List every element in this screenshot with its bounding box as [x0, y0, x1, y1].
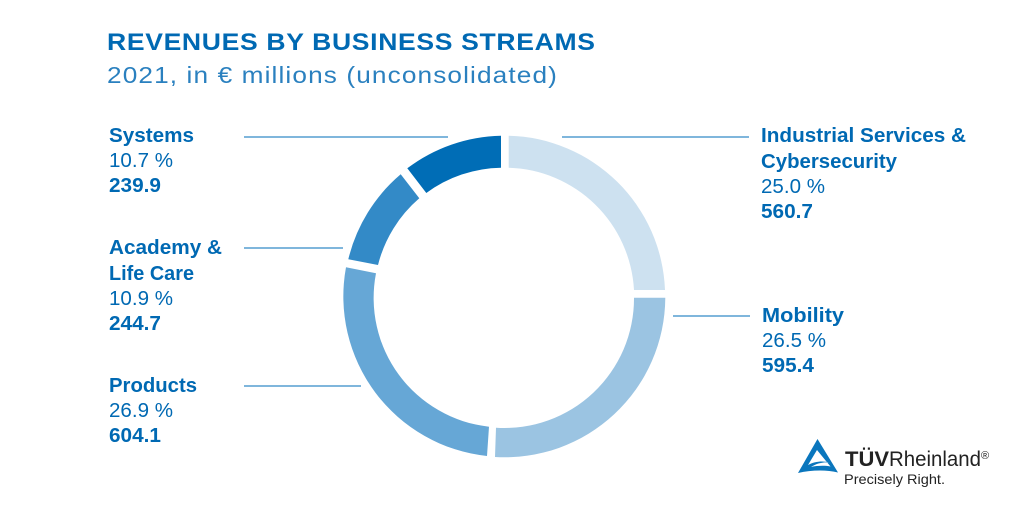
logo tagline: Precisely Right. — [844, 471, 945, 487]
logo: TÜV Rheinland — [798, 439, 989, 487]
segment: Products — [343, 267, 489, 456]
label: Academy & Life Care: Academy & — [109, 237, 222, 259]
leader line: Systems — [244, 136, 448, 138]
label: Products: Products — [109, 375, 197, 397]
icon: triangle — [798, 439, 838, 473]
segment: Systems — [407, 136, 501, 193]
label: Industrial Services & Cybersecurity — [761, 125, 966, 223]
label: Mobility — [762, 305, 845, 377]
label: Industrial Services & Cybersecurity: 560.7 — [761, 201, 813, 223]
title: REVENUES BY BUSINESS STREAMS — [107, 29, 596, 56]
label: Mobility: Mobility — [762, 305, 845, 327]
logo wordmark: Rheinland: Rheinland — [889, 448, 981, 471]
leader line: Products — [244, 385, 361, 387]
segment: Industrial Services & Cybersecurity — [509, 136, 665, 290]
leader line: Mobility — [673, 315, 750, 317]
registered mark: ® — [981, 450, 989, 462]
label: Mobility: 595.4 — [762, 355, 815, 377]
label: Academy & Life Care: 10.9 % — [109, 288, 173, 310]
segment: Mobility — [495, 298, 665, 457]
donut chart — [343, 136, 665, 457]
leader line: Industrial Services & Cybersecurity — [562, 136, 749, 138]
label: Industrial Services & Cybersecurity: Industrial Services & — [761, 125, 966, 147]
segment: Academy & Life Care — [348, 174, 419, 265]
label: Academy & Life Care — [109, 237, 222, 335]
label: Systems: 239.9 — [109, 175, 161, 197]
leader line: Academy & Life Care — [244, 247, 343, 249]
label: Products: 26.9 % — [109, 400, 173, 422]
label: Systems: 10.7 % — [109, 150, 173, 172]
label: Systems — [109, 125, 194, 197]
label: Mobility: 26.5 % — [762, 330, 826, 352]
subtitle: 2021, in € millions (unconsolidated) — [107, 62, 558, 88]
label: Products — [109, 375, 197, 447]
label: Academy & Life Care: 244.7 — [109, 313, 161, 335]
label: Industrial Services & Cybersecurity: 25.0 % — [761, 176, 825, 198]
label: Systems: Systems — [109, 125, 194, 147]
label: Products: 604.1 — [109, 425, 161, 447]
logo wordmark: TÜV: TÜV — [845, 448, 889, 471]
label: Academy & Life Care: Life Care — [109, 263, 194, 285]
label: Industrial Services & Cybersecurity: Cybersecurity — [761, 151, 898, 173]
